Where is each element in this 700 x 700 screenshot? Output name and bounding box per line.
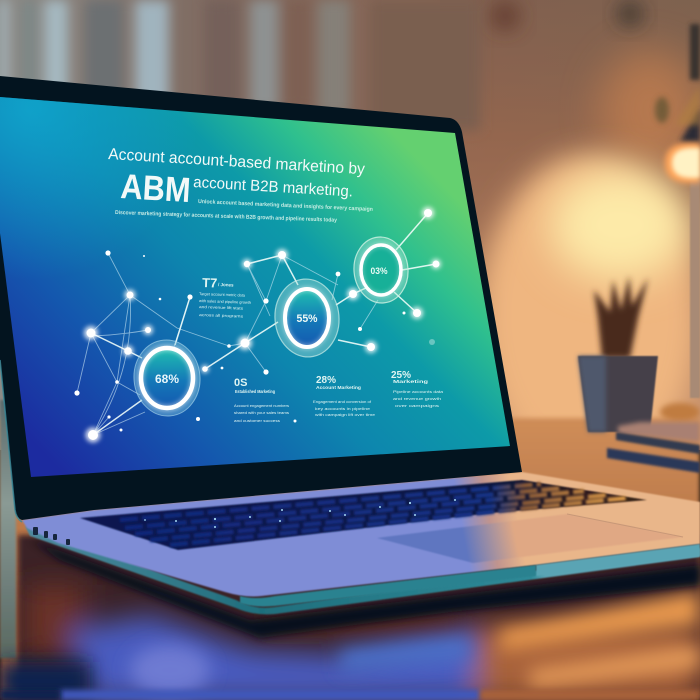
lamp xyxy=(655,24,700,398)
screen subtitle lines xyxy=(115,199,374,224)
screen heading: account B2B marketing. xyxy=(193,174,353,200)
ring: 03%: 03% xyxy=(370,266,388,276)
ring: 68%: 68% xyxy=(155,372,179,386)
screen subtitle lines: Unlock account based marketing data and insights for every campaign xyxy=(198,199,374,213)
stat block: 0%: Account engagement numbers xyxy=(234,404,289,408)
stat block: 77: T7 xyxy=(202,275,218,291)
ring: 55%: 55% xyxy=(296,313,318,325)
nodes xyxy=(84,207,441,442)
stat block: 77: across all programs xyxy=(199,313,243,319)
network diagram xyxy=(74,207,441,442)
screen heading: ABM xyxy=(120,167,192,210)
stat block: 0%: Established Marketing xyxy=(235,389,275,394)
screen xyxy=(0,97,510,477)
laptop lid xyxy=(0,76,522,522)
stat block: 77: with sales and pipeline growth xyxy=(199,299,251,305)
stat block: 25%: and revenue growth xyxy=(393,397,441,401)
keyboard sparkles xyxy=(144,499,456,528)
stat block: 77 xyxy=(199,275,251,319)
screen subtitle lines: Discover marketing strategy for accounts at scale with B2B growth and pipeline results today xyxy=(115,210,338,224)
stat block: 28%: Account Marketing xyxy=(316,385,361,390)
stat block: 77: / Jones xyxy=(218,282,234,288)
plant in pot xyxy=(578,276,658,432)
left strip of background xyxy=(0,400,16,658)
stat block: 28%: 28% xyxy=(316,375,336,386)
books xyxy=(607,422,700,473)
stat block: 28%: Engagement and conversion of xyxy=(313,400,372,404)
stat block: 0%: shared with your sales teams xyxy=(234,411,289,415)
stat block: 77: and revenue lift stats xyxy=(199,305,243,311)
stat block: 28%: with campaign lift over time xyxy=(315,413,375,417)
ring: 55% xyxy=(272,276,342,360)
trackpad xyxy=(377,514,683,563)
laptop shadow xyxy=(30,540,700,638)
stat block: 25% xyxy=(391,370,444,408)
stat block: 0% xyxy=(234,377,289,423)
stat block: 25%: 25% xyxy=(391,370,411,381)
background wall xyxy=(0,0,700,475)
screen heading xyxy=(108,146,365,210)
side ports xyxy=(33,527,70,545)
stat block: 0%: 0S xyxy=(234,377,247,389)
ring: 03% xyxy=(351,235,411,305)
stat block: 25%: over campaigns xyxy=(395,404,439,408)
curtains xyxy=(0,0,480,130)
table reflection xyxy=(0,400,700,700)
stat block: 25%: Marketing xyxy=(393,379,428,384)
stat block: 28% xyxy=(313,375,375,417)
ring: 68% xyxy=(131,337,203,419)
screen heading: Account account-based marketino by xyxy=(108,146,365,178)
stat block: 77: Target account metric data xyxy=(199,292,246,298)
keyboard xyxy=(80,480,647,550)
stat block: 25%: Pipeline accounts data xyxy=(393,390,444,394)
desk table xyxy=(0,403,700,700)
stat block: 28%: key accounts in pipeline xyxy=(315,407,370,411)
laptop base xyxy=(22,472,700,614)
stat block: 0%: and customer success xyxy=(234,419,280,423)
